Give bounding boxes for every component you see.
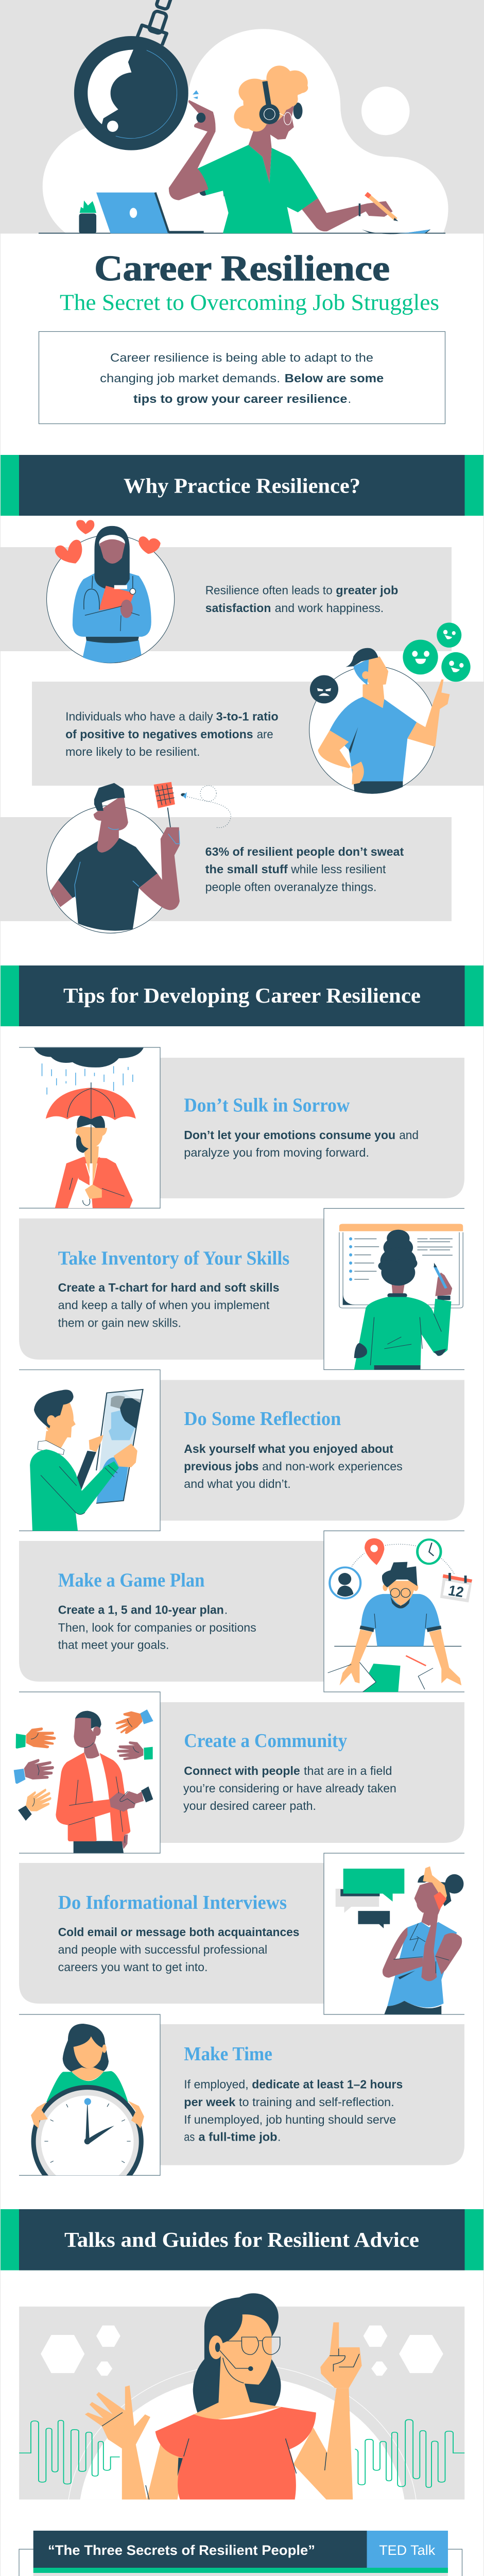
heading and text: Create a 1, 5 and 10-year plan [58, 1603, 224, 1617]
section heading: talks and guides: Talks and Guides for Resilient Advice [64, 2228, 419, 2251]
heading and text: you’re considering or have already taken [183, 1782, 396, 1795]
illustration: woman on phone with speech bubbles [336, 1866, 463, 2014]
heading and text [58, 1570, 256, 1652]
intro text box [39, 332, 445, 423]
heading and text: Make Time [184, 2043, 272, 2065]
heading and text: Don’t Sulk in Sorrow [184, 1095, 350, 1116]
text: small stuff [205, 845, 404, 893]
text: positive emotions: more likely to be resilient. [65, 745, 200, 758]
illustration: man with emoji faces [309, 622, 471, 794]
tip 1: don't sulk in sorrow [19, 1047, 464, 1208]
text: small stuff: while less resilient [290, 862, 386, 876]
heading and text [184, 2043, 403, 2144]
text: small stuff: 63% of resilient people don’t sweat [205, 845, 404, 858]
heading and text: and non-work experiences [262, 1460, 403, 1473]
heading and text: your desired career path. [183, 1799, 316, 1812]
heading and text: careers you want to get into. [58, 1960, 208, 1974]
section heading: why practice resilience: Why Practice Resilience? [124, 474, 360, 498]
text: positive emotions: Individuals who have a daily [65, 710, 213, 723]
tip 5: create a community [14, 1692, 464, 1853]
section heading: why practice resilience [1, 455, 483, 516]
intro text box: Career resilience is being able to adapt to the [110, 351, 373, 364]
intro text box: tips to grow your career resilience [133, 392, 347, 405]
emoji faces [310, 622, 471, 703]
heading and text: paralyze you from moving forward. [184, 1146, 369, 1159]
illustration: woman with headset and sound waves [19, 2293, 464, 2500]
heading and text: Take Inventory of Your Skills [58, 1248, 289, 1269]
heading and text: . [224, 1603, 228, 1617]
illustration: man planning at desk: 12 [447, 1582, 465, 1600]
section heading: talks and guides [1, 2209, 483, 2270]
text: small stuff: the small stuff [205, 862, 288, 876]
heading and text: and keep a tally of when you implement [58, 1298, 270, 1312]
text: job satisfaction: greater job [336, 584, 398, 597]
heading and text: Ask yourself what you enjoyed about [184, 1442, 393, 1455]
heading and text: Make a Game Plan [58, 1570, 204, 1591]
hero illustration: woman with wrecking ball [0, 0, 484, 234]
section heading: tips [1, 965, 483, 1026]
resource card: the three secrets of resilient people: “The Three Secrets of Resilient People” [48, 2543, 315, 2558]
illustration: woman writing on T-chart [339, 1224, 463, 1370]
hands [14, 1709, 153, 1821]
plant [79, 200, 96, 233]
woman [169, 65, 430, 234]
text: positive emotions [65, 710, 279, 758]
heading and text: a full-time job [199, 2130, 277, 2144]
illustration: woman with umbrella in rain [34, 1048, 144, 1208]
text: positive emotions: of positive to negatives emotions [65, 727, 253, 741]
heading and text: If employed, [184, 2078, 249, 2091]
heading and text: Create a T-chart for hard and soft skills [58, 1281, 279, 1294]
text: job satisfaction: satisfaction [205, 601, 271, 615]
sparks [193, 90, 199, 99]
heading and text: If unemployed, job hunting should serve [184, 2113, 396, 2126]
heading and text: that meet your goals. [58, 1638, 169, 1652]
heading and text: previous jobs [184, 1460, 258, 1473]
panel: positive emotions [32, 622, 484, 794]
heading and text [58, 1248, 289, 1329]
chain [137, 0, 172, 45]
subtitle: The Secret to Overcoming Job Struggles [60, 290, 439, 315]
illustration: man surrounded by hands [14, 1709, 153, 1853]
heading and text [184, 1408, 403, 1490]
heading and text: that are in a field [304, 1764, 392, 1777]
heading and text: per week [184, 2095, 236, 2109]
illustration: man looking in mirror [30, 1389, 143, 1531]
tip 2: take inventory of your skills [19, 1209, 464, 1370]
heading and text: dedicate at least 1–2 hours [252, 2078, 403, 2091]
wrecking ball [74, 36, 188, 150]
heading and text: to training and self-reflection. [239, 2095, 394, 2109]
heading and text: . [278, 2130, 281, 2144]
intro text box: . [348, 392, 351, 405]
resource card: the three secrets of resilient people [19, 2531, 462, 2576]
tip 4: make a game plan [19, 1531, 472, 1692]
text: positive emotions: are [257, 727, 273, 741]
text: positive emotions: 3-to-1 ratio [216, 710, 279, 723]
laptop [96, 193, 204, 233]
heading and text: Do Informational Interviews [58, 1892, 287, 1913]
heading and text: Cold email or message both acquaintances [58, 1925, 299, 1939]
heading and text: as [184, 2130, 195, 2144]
text: job satisfaction: and work happiness. [275, 601, 384, 615]
intro text box: Below are some [285, 371, 384, 385]
intro text box: changing job market demands. [100, 371, 280, 385]
heading and text: them or gain new skills. [58, 1316, 181, 1329]
illustration: doctor with hearts [47, 520, 175, 663]
panel: small stuff [0, 782, 452, 933]
tip 6: do informational interviews [19, 1853, 464, 2014]
text: job satisfaction [205, 584, 398, 615]
heading and text [183, 1730, 396, 1812]
text: small stuff: people often overanalyze things. [205, 880, 376, 893]
illustration: man with fly swatter [47, 782, 231, 933]
tip 3: do some reflection [19, 1370, 464, 1531]
heading and text [184, 1095, 419, 1159]
hearts [55, 520, 161, 564]
heading and text: and people with successful professional [58, 1943, 267, 1956]
panel: job satisfaction [0, 520, 452, 663]
heading and text: Connect with people [184, 1764, 300, 1777]
illustration: woman holding clock [31, 2024, 144, 2175]
heading and text: Do Some Reflection [184, 1408, 341, 1430]
text: job satisfaction: Resilience often leads to [205, 584, 333, 597]
illustration: man planning at desk [328, 1538, 472, 1692]
title: Career Resilience [94, 249, 390, 289]
heading and text: Then, look for companies or positions [58, 1621, 256, 1634]
heading and text: and [399, 1128, 419, 1142]
tip 7: make time [19, 2014, 464, 2176]
resource card: the three secrets of resilient people: TED Talk [379, 2543, 436, 2558]
heading and text: and what you didn’t. [184, 1477, 291, 1490]
heading and text: Create a Community [184, 1730, 347, 1752]
section heading: tips: Tips for Developing Career Resilience [63, 984, 421, 1007]
heading and text [58, 1892, 299, 1974]
heading and text: Don’t let your emotions consume you [184, 1128, 395, 1142]
